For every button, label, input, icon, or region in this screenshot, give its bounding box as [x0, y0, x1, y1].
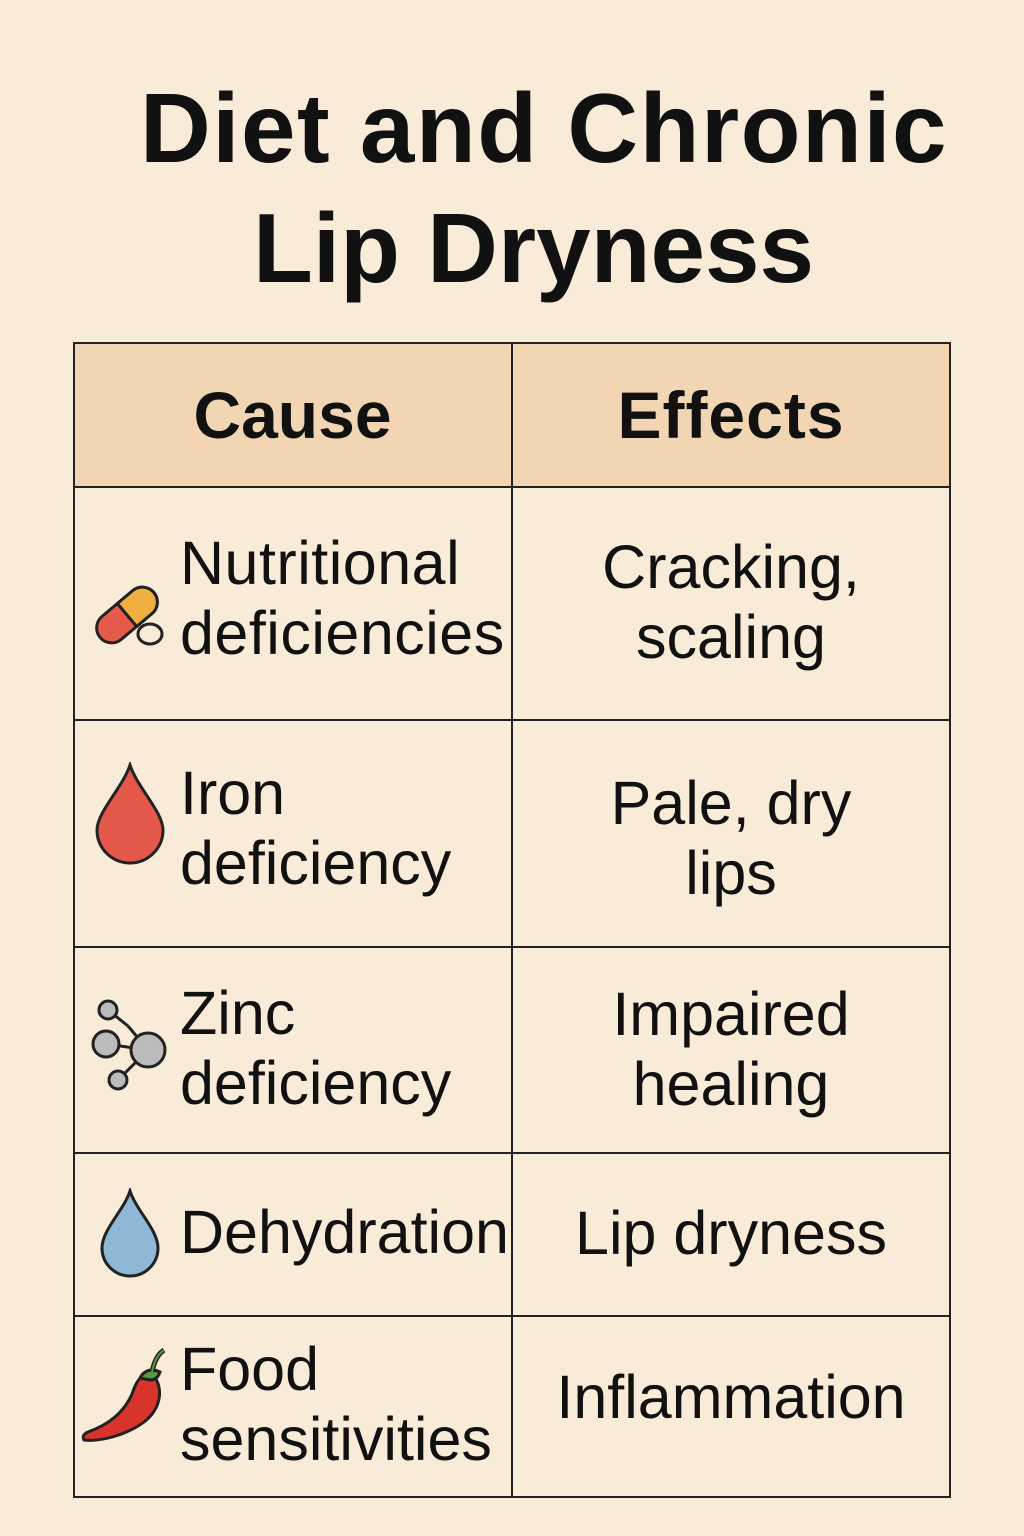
effect 1 — [602, 533, 860, 671]
effect 1: Cracking, — [602, 533, 860, 601]
icon: zinc molecule — [92, 1000, 166, 1090]
effect 4: Lip dryness — [575, 1199, 887, 1267]
title — [140, 73, 948, 303]
effect 1: scaling — [636, 603, 826, 671]
cause 2 — [180, 759, 452, 897]
cause 5 — [180, 1335, 492, 1473]
icon: chili pepper — [82, 1348, 166, 1442]
cause 1: Nutritional — [180, 529, 460, 597]
icon: pill — [95, 586, 164, 646]
cause 2: Iron — [180, 759, 285, 827]
cause 3 — [180, 979, 452, 1117]
effect 3: healing — [633, 1050, 829, 1118]
icon: blood drop — [96, 762, 164, 864]
effect 2 — [611, 769, 852, 907]
cause 5: sensitivities — [180, 1405, 492, 1473]
title: Lip Dryness — [253, 193, 814, 303]
cause 1: deficiencies — [180, 599, 505, 667]
effect 2: lips — [685, 839, 777, 907]
cause 3: deficiency — [180, 1049, 451, 1117]
icon: water drop — [100, 1188, 160, 1278]
effect 2: Pale, dry — [611, 769, 851, 837]
effect 3 — [612, 980, 850, 1118]
header: cause: Cause — [193, 378, 392, 452]
cause 3: Zinc — [180, 979, 295, 1047]
cause 2: deficiency — [180, 829, 451, 897]
table — [73, 342, 951, 1498]
cause 1 — [180, 529, 505, 667]
title: Diet and Chronic — [140, 73, 948, 183]
effect 5: Inflammation — [556, 1363, 906, 1431]
header: effects: Effects — [617, 378, 845, 452]
cause 5: Food — [180, 1335, 319, 1403]
cause 4: Dehydration — [180, 1198, 509, 1266]
effect 3: Impaired — [612, 980, 850, 1048]
